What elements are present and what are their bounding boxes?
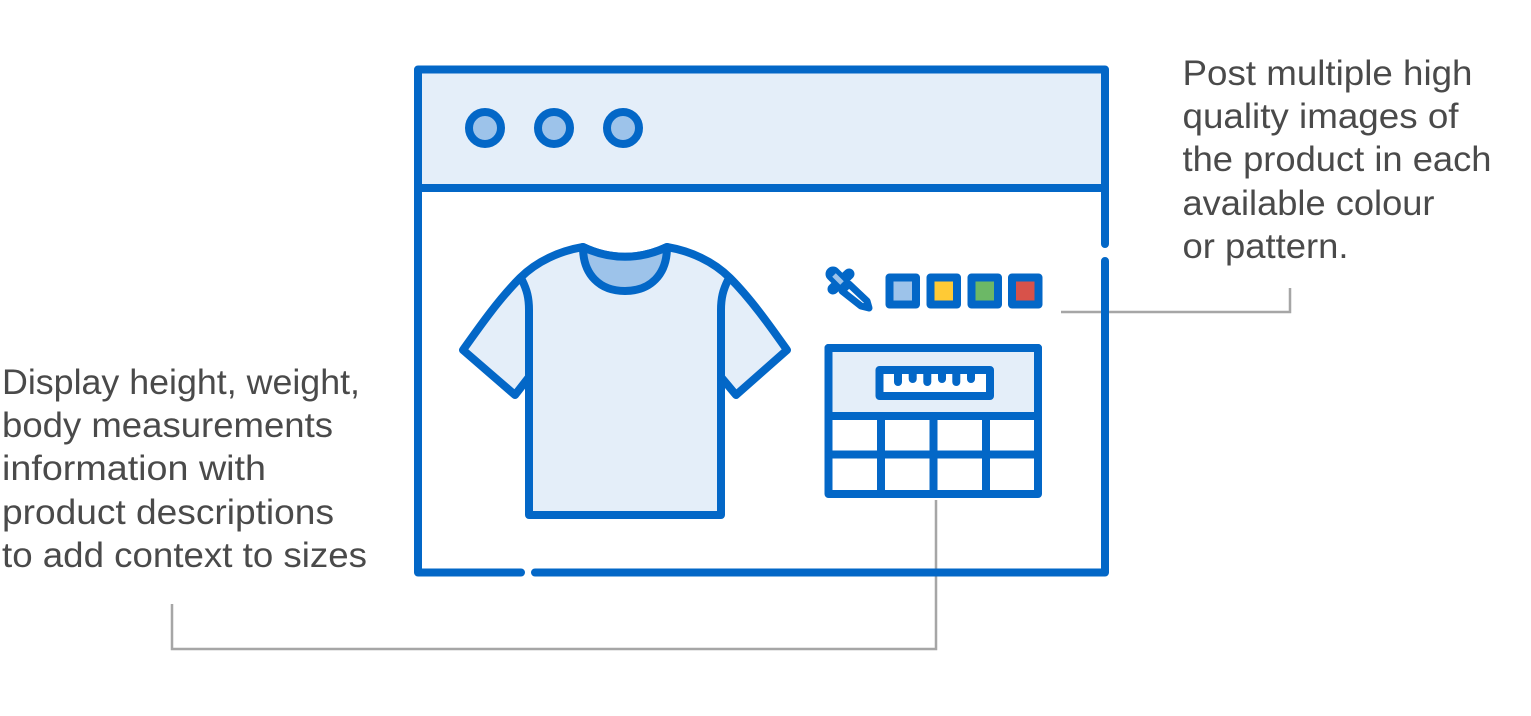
window title bar	[418, 70, 1105, 188]
size table	[828, 348, 1038, 494]
text: left note: body measurements	[2, 406, 333, 445]
text: left note: information with	[2, 449, 266, 488]
connector line: colour swatches to right note	[1061, 288, 1290, 312]
text: right note	[1182, 54, 1492, 266]
window outline	[418, 70, 1105, 572]
text: left note: to add context to sizes	[2, 536, 367, 575]
icon: t-shirt	[463, 247, 787, 515]
text: right note: available colour	[1182, 184, 1435, 223]
text: left note: Display height, weight,	[2, 363, 360, 402]
icon: colour dropper	[833, 274, 869, 308]
text: left note	[2, 363, 367, 575]
text: right note: or pattern.	[1182, 227, 1348, 266]
icon: ruler	[880, 370, 990, 396]
browser window	[418, 70, 1105, 572]
text: right note: the product in each	[1182, 140, 1492, 179]
colour swatches	[890, 278, 1038, 304]
text: right note: quality images of	[1182, 97, 1459, 136]
window control dots	[469, 112, 639, 144]
text: right note: Post multiple high	[1182, 54, 1472, 93]
text: left note: product descriptions	[2, 493, 334, 532]
connector line: size table to left note	[172, 500, 936, 649]
